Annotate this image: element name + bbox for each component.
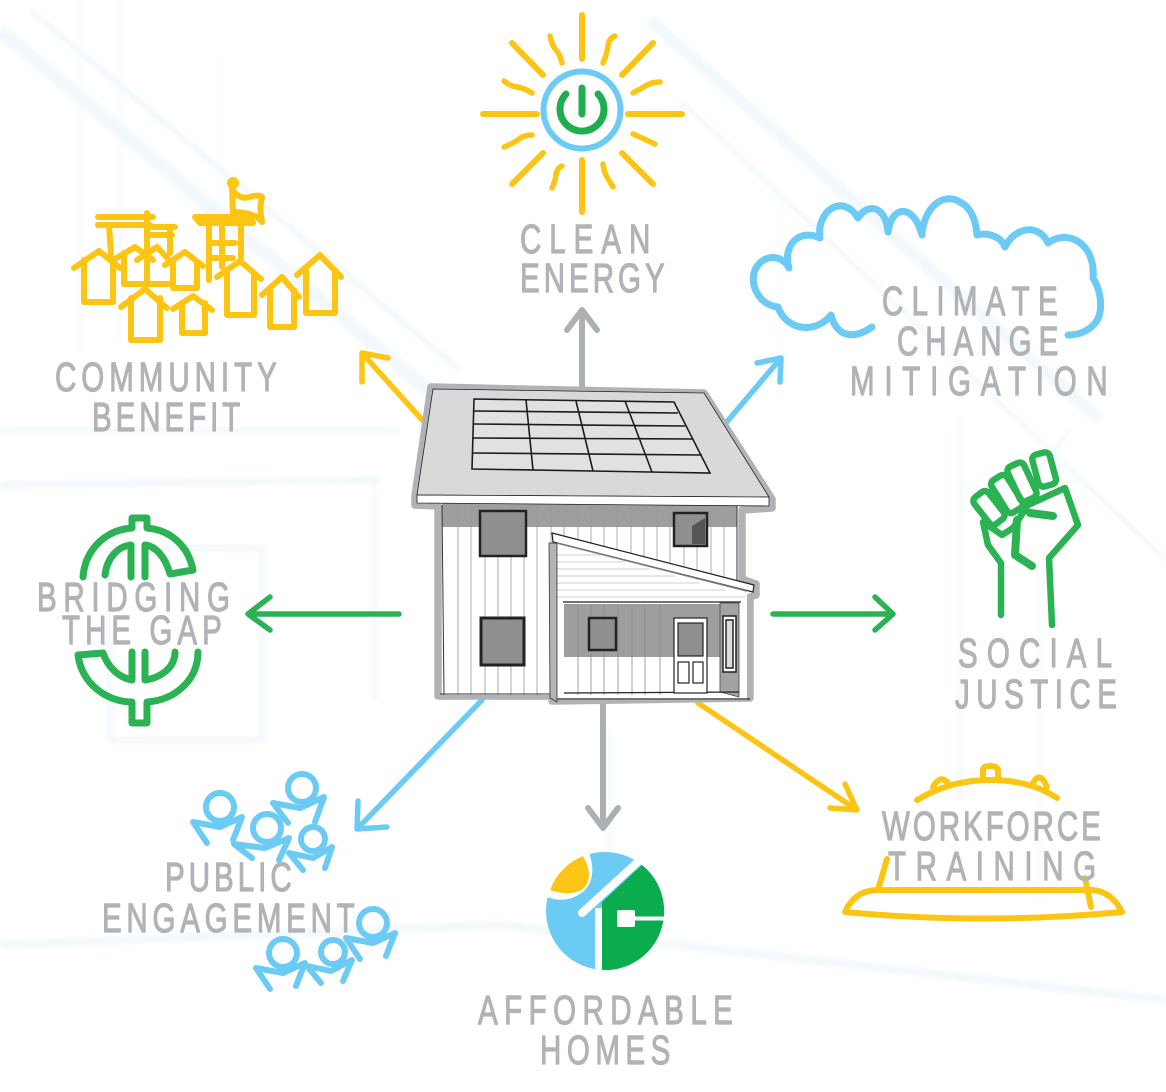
- lower left window: [481, 618, 524, 665]
- text: climate change mitigation: MITIGATION: [850, 358, 1108, 404]
- text: bridging the gap: BRIDGING: [37, 574, 230, 620]
- text: workforce training: WORKFORCE: [882, 803, 1101, 849]
- icon: group of people: [193, 774, 395, 989]
- arrow: to affordable homes: [588, 700, 618, 828]
- text: workforce training: [882, 803, 1101, 889]
- icon: raised fist: [971, 451, 1078, 625]
- roof fascia: [417, 495, 769, 506]
- porch window: [589, 618, 616, 650]
- roof: [417, 389, 769, 497]
- house halo outline: [415, 387, 772, 701]
- text: clean energy: CLEAN: [520, 216, 650, 262]
- upper wall with shade band: [440, 503, 737, 695]
- text: clean energy: [520, 216, 665, 301]
- text: community benefit: BENEFIT: [92, 394, 240, 440]
- text: community benefit: COMMUNITY: [55, 354, 277, 400]
- arrow: to public engagement: [357, 700, 482, 829]
- icon: houses and towers community: [74, 180, 341, 340]
- arrow: to social justice: [773, 597, 893, 630]
- text: bridging the gap: [37, 574, 230, 653]
- icon: logo circle with house and sun: [540, 850, 666, 975]
- arrow: to bridging the gap: [248, 597, 399, 630]
- arrow: to workforce training: [698, 703, 857, 810]
- text: social justice: [955, 630, 1117, 717]
- text: climate change mitigation: [850, 278, 1108, 404]
- text: community benefit: [55, 354, 277, 440]
- arrow: to clean energy: [567, 310, 597, 388]
- icon: dollar sign: [78, 518, 198, 723]
- front door: [674, 618, 707, 693]
- text: public engagement: [102, 854, 355, 941]
- upper left window: [480, 511, 526, 556]
- porch wing: [549, 533, 754, 702]
- text: public engagement: PUBLIC: [165, 854, 292, 900]
- text: workforce training: TRAINING: [888, 843, 1096, 889]
- text: climate change mitigation: CLIMATE: [882, 278, 1058, 324]
- text: clean energy: ENERGY: [520, 255, 665, 301]
- side window: [723, 616, 736, 672]
- text: climate change mitigation: CHANGE: [897, 318, 1058, 364]
- text: affordable homes: [478, 987, 733, 1073]
- text: social justice: SOCIAL: [958, 630, 1112, 676]
- icon: hard hat: [845, 766, 1122, 918]
- text: bridging the gap: THE GAP: [62, 607, 222, 653]
- solar panel array: [472, 399, 710, 473]
- icon: sun with power button: [483, 15, 682, 212]
- arrow: to climate change mitigation: [725, 358, 781, 424]
- arrow: to community benefit: [362, 353, 424, 422]
- illustration: solar house: [415, 387, 772, 702]
- text: public engagement: ENGAGEMENT: [102, 895, 355, 941]
- text: social justice: JUSTICE: [955, 671, 1117, 717]
- icon: cloud: [753, 199, 1101, 335]
- text: affordable homes: HOMES: [540, 1027, 670, 1073]
- upper right window: [674, 513, 707, 546]
- text: affordable homes: AFFORDABLE: [478, 987, 733, 1033]
